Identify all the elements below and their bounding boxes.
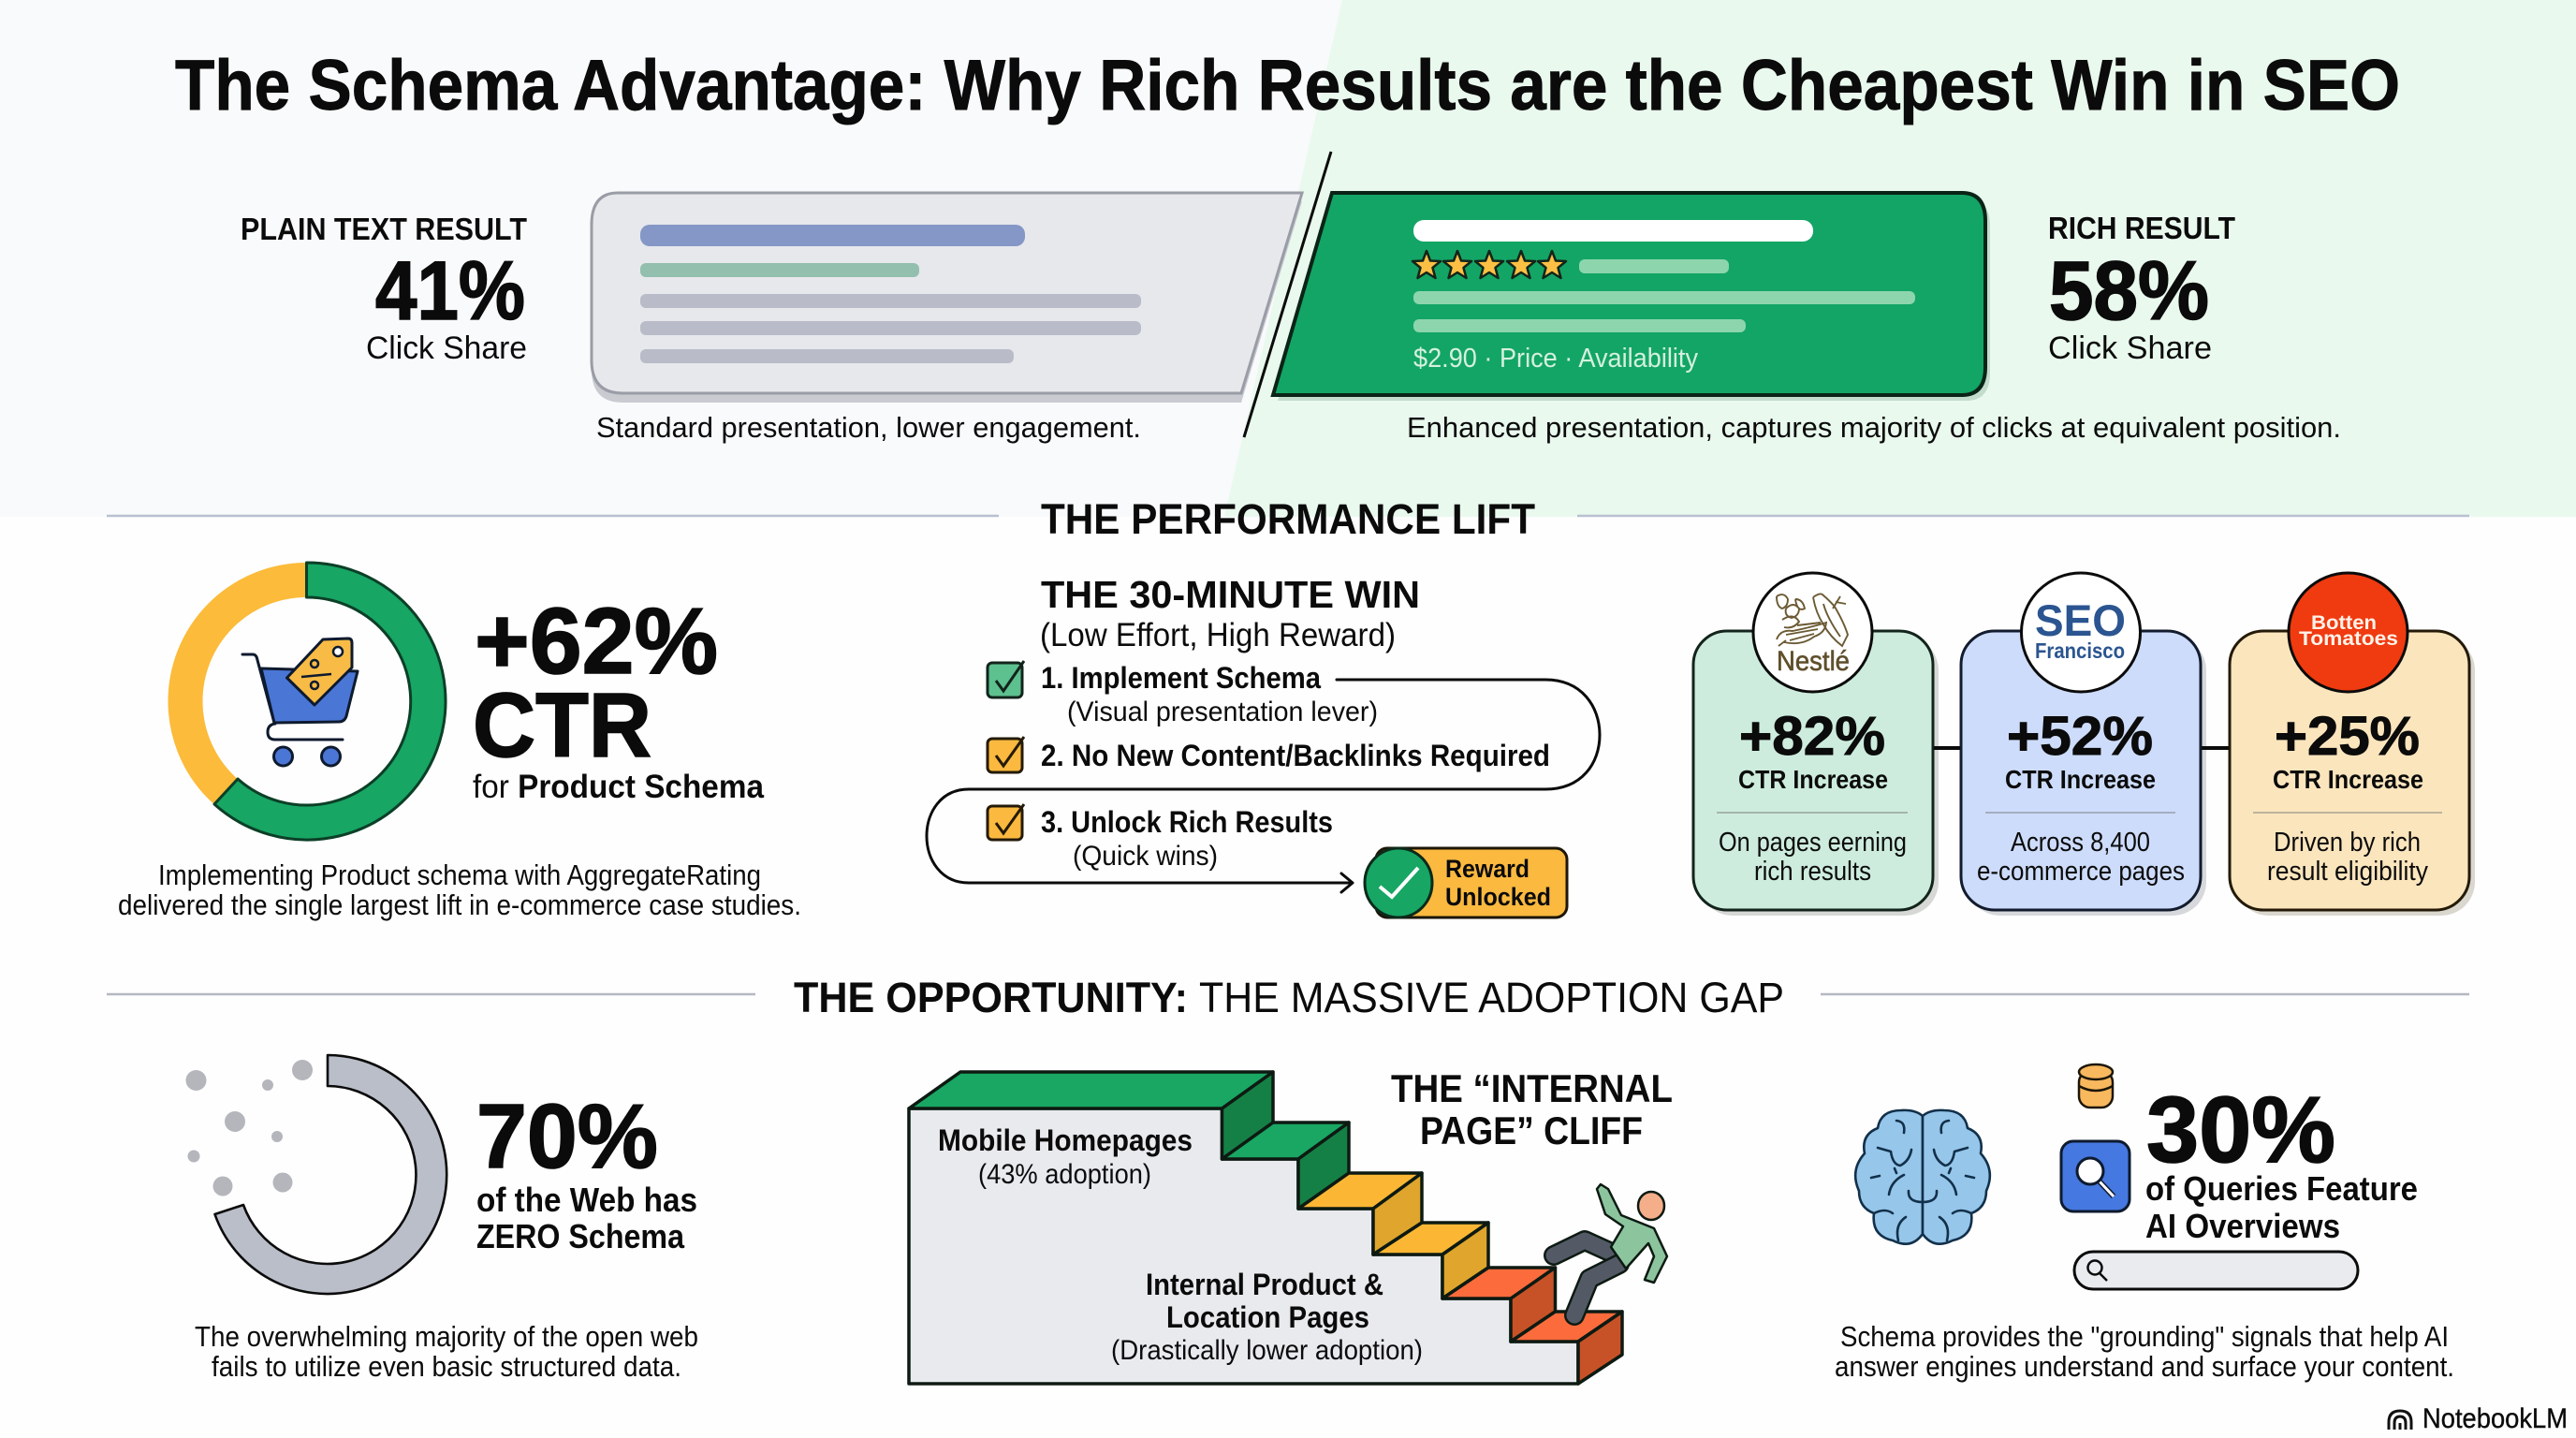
- card: SEO Francisco: [1961, 573, 2206, 916]
- heading: the opportunity: THE MASSIVE ADOPTION GAP: [1199, 974, 1784, 1021]
- heading: internal page cliff: THE “INTERNAL: [1391, 1066, 1673, 1110]
- label: CTR increase: CTR Increase: [1738, 765, 1888, 794]
- note: [1719, 828, 1907, 887]
- text block: grounding note: Schema provides the "grounding" signals that help AI: [1840, 1320, 2449, 1353]
- subheading: (Low Effort, High Reward): [1040, 617, 1396, 653]
- text block: product schema note: delivered the single largest lift in e-commerce case studies.: [118, 888, 801, 921]
- panel: rich result stat: [2048, 211, 2235, 366]
- step 3 label: 3. Unlock Rich Results: [1041, 805, 1333, 839]
- stat: 70% of the web: [476, 1085, 697, 1255]
- logo: Botten Tomatoes: Botten: [2311, 612, 2377, 634]
- stat: 70% of the web: 70%: [476, 1085, 658, 1187]
- step 2 checkbox: [988, 737, 1024, 772]
- stat: 70% of the web: of the Web has: [476, 1181, 697, 1219]
- icon: database: [2079, 1064, 2113, 1108]
- chart: 70% ring with scattering dots: [185, 1055, 446, 1294]
- title: The Schema Advantage: Why Rich Results are the Cheapest Win in SEO: [175, 46, 2400, 125]
- step 1 note: (Visual presentation lever): [1067, 697, 1378, 727]
- divider between results: [1244, 152, 1331, 437]
- label: plain text result: PLAIN TEXT RESULT: [241, 212, 527, 246]
- heading: the opportunity: THE OPPORTUNITY:: [794, 974, 1188, 1021]
- heading: 30-minute win: THE 30-MINUTE WIN: [1041, 573, 1420, 616]
- stair labels: (43% adoption): [978, 1159, 1151, 1190]
- stair labels: Mobile Homepages: [938, 1123, 1193, 1157]
- icon: search square: [2061, 1141, 2130, 1211]
- text block: product schema note: Implementing Product schema with AggregateRating: [158, 858, 761, 891]
- stair labels: [938, 1123, 1423, 1366]
- text block: grounding note: [1835, 1320, 2454, 1383]
- connector path with arrow: [927, 680, 1600, 892]
- logo: Botten Tomatoes: Tomatoes: [2299, 628, 2398, 650]
- step 1 label: 1. Implement Schema: [1041, 661, 1321, 695]
- stair labels: Internal Product &: [1146, 1268, 1383, 1301]
- price line: $2.90 · Price · Availability: [1413, 344, 1698, 374]
- stat: 30% of queries: [2145, 1078, 2418, 1245]
- icon: shopping cart with tag: [242, 638, 358, 766]
- badge: reward unlocked: Reward: [1445, 855, 1530, 883]
- label: click share: Click Share: [366, 330, 527, 366]
- stat: +62% CTR: +62%: [475, 589, 718, 694]
- label: click share: Click Share: [2048, 330, 2212, 366]
- step 1 checkbox: [988, 661, 1024, 697]
- badge: reward unlocked: Unlocked: [1445, 883, 1551, 911]
- stat: +52%: +52%: [2007, 706, 2153, 767]
- stat: 30% of queries: AI Overviews: [2145, 1207, 2340, 1245]
- stat: 30% of queries: 30%: [2146, 1078, 2335, 1182]
- icon: falling person: [1554, 1184, 1667, 1315]
- icon: search bar: [2074, 1252, 2358, 1289]
- note: [2267, 828, 2428, 887]
- note: [1977, 828, 2185, 887]
- stat: 30% of queries: of Queries Feature: [2145, 1169, 2418, 1208]
- step 3 note: (Quick wins): [1073, 841, 1218, 872]
- note: rich results: [1754, 857, 1871, 887]
- stat: 58%: 58%: [2049, 243, 2209, 337]
- donut chart: 62% CTR with cart: [185, 563, 446, 840]
- logo: Nestle bird nest: [1753, 573, 1872, 692]
- icon: five rating stars: [1412, 251, 1566, 278]
- logo: Nestle bird nest: Nestlé: [1777, 646, 1850, 677]
- stat: 70% of the web: ZERO Schema: [476, 1217, 685, 1255]
- label: rich result: RICH RESULT: [2048, 211, 2235, 245]
- badge: reward unlocked: [1365, 848, 1567, 917]
- note: Driven by rich: [2274, 828, 2421, 858]
- label: CTR increase: CTR Increase: [2273, 765, 2423, 794]
- stair labels: (Drastically lower adoption): [1111, 1335, 1423, 1366]
- step 2 label: 2. No New Content/Backlinks Required: [1041, 739, 1550, 772]
- text block: product schema note: [118, 858, 801, 921]
- stat: +82%: +82%: [1739, 706, 1885, 767]
- note: Across 8,400: [2011, 828, 2150, 858]
- card: Nestle: [1693, 573, 1939, 916]
- note: On pages eerning: [1719, 828, 1907, 858]
- logo: Botten Tomatoes: [2289, 573, 2408, 692]
- stat: +62% CTR: [473, 589, 764, 805]
- chart: internal page cliff staircase: [909, 1072, 1622, 1384]
- note: e-commerce pages: [1977, 857, 2185, 887]
- caption: rich result: Enhanced presentation, captures majority of clicks at equivalent position.: [1407, 411, 2341, 444]
- caption: plain result: Standard presentation, lower engagement.: [596, 411, 1141, 444]
- heading: internal page cliff: PAGE” CLIFF: [1420, 1108, 1643, 1152]
- stair labels: Location Pages: [1166, 1300, 1369, 1334]
- text block: grounding note: answer engines understand and surface your content.: [1835, 1350, 2454, 1383]
- label: CTR increase: CTR Increase: [2005, 765, 2156, 794]
- logo: SEO Francisco: [2022, 573, 2140, 692]
- heading: the performance lift: THE PERFORMANCE LIFT: [1041, 495, 1535, 543]
- text block: open web note: The overwhelming majority of the open web: [195, 1320, 698, 1353]
- panel: plain text result stat: [241, 212, 527, 366]
- stat: 41%: 41%: [375, 243, 525, 337]
- logo: SEO Francisco: Francisco: [2035, 638, 2125, 663]
- card: Rotten Tomatoes: [2230, 573, 2475, 916]
- icon: brain: [1855, 1110, 1990, 1244]
- panel: rich search result mockup: [1273, 193, 1990, 401]
- label: for product schema: for Product Schema: [473, 769, 764, 805]
- panel: plain search result mockup: [592, 193, 1302, 403]
- stat: +25%: +25%: [2275, 706, 2420, 767]
- panel: the 30-minute win: [927, 573, 1600, 917]
- text block: open web note: [195, 1320, 698, 1383]
- text block: open web note: fails to utilize even basic structured data.: [212, 1350, 681, 1383]
- step 3 checkbox: [988, 804, 1024, 840]
- connector lines between cards: [1934, 746, 2229, 750]
- main stair face: [909, 1108, 1578, 1384]
- stat: +62% CTR: CTR: [473, 674, 651, 776]
- note: result eligibility: [2267, 857, 2428, 887]
- logo: SEO Francisco: SEO: [2035, 595, 2126, 645]
- heading: the opportunity: [794, 974, 1784, 1021]
- heading: internal page cliff: [1391, 1066, 1673, 1152]
